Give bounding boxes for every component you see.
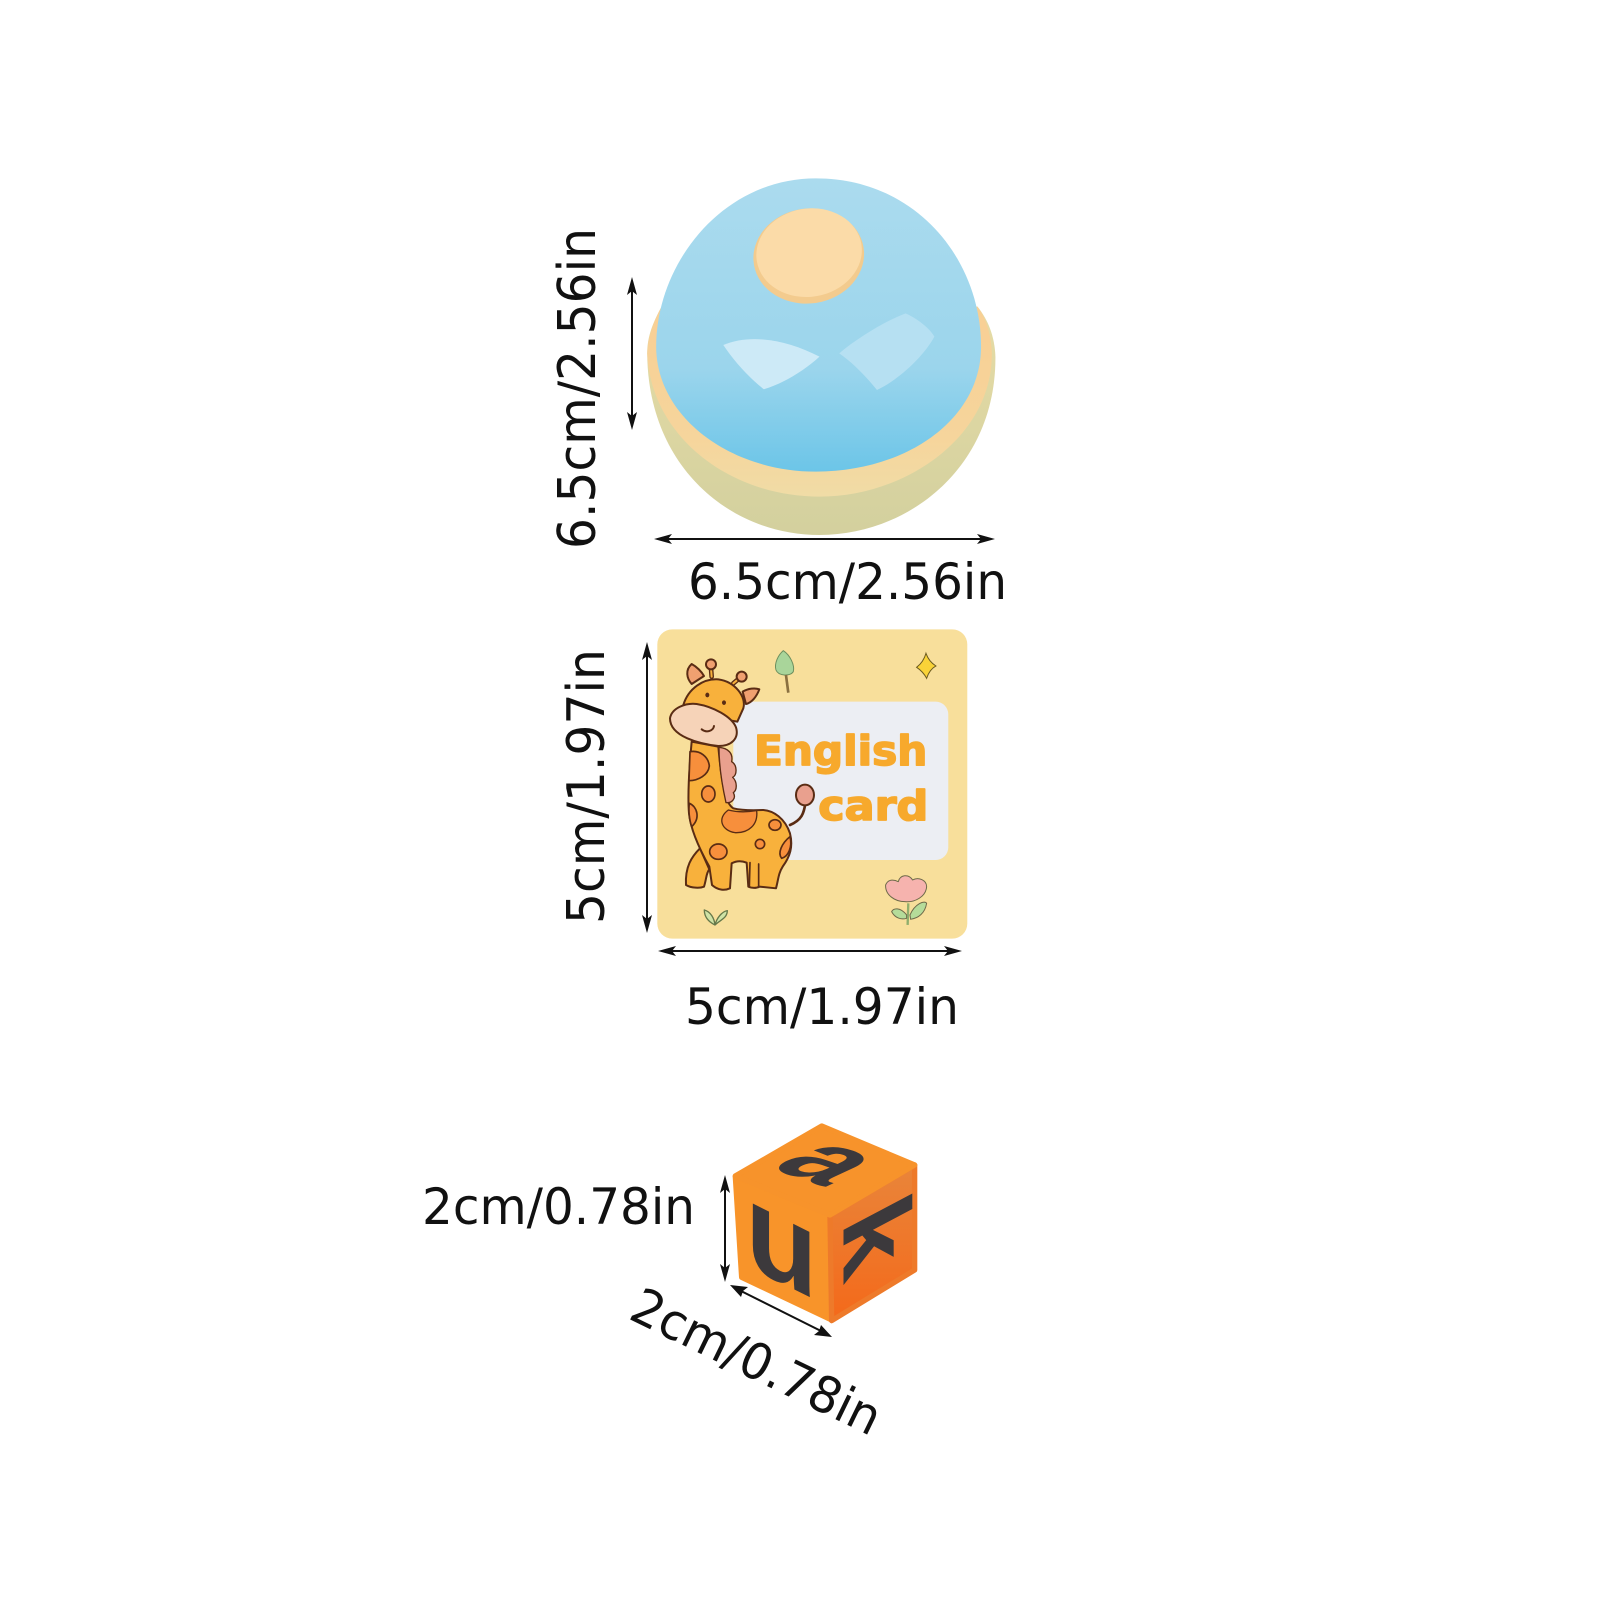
letter cube illustration xyxy=(735,1123,928,1328)
label: cube height: 2cm/0.78in xyxy=(422,1178,695,1236)
label: cube width: 2cm/0.78in xyxy=(622,1277,891,1447)
icon: star xyxy=(917,653,936,678)
label: card height: 5cm/1.97in xyxy=(557,649,617,924)
arrow: bell width xyxy=(654,534,995,544)
icon: leaf xyxy=(775,651,794,693)
label: bell height: 6.5cm/2.56in xyxy=(548,228,608,549)
cube letters: a xyxy=(746,1123,921,1198)
flash card illustration xyxy=(657,629,967,939)
icon: sprout xyxy=(704,910,727,925)
cube letters: u xyxy=(746,1154,818,1328)
card background xyxy=(657,629,967,939)
bell base top rim xyxy=(647,307,992,497)
bell base side xyxy=(647,307,995,535)
cube letters xyxy=(746,1123,928,1328)
arrow: cube height xyxy=(720,1175,730,1282)
label: card width: 5cm/1.97in xyxy=(685,978,959,1036)
card title xyxy=(754,727,928,830)
icon: giraffe xyxy=(670,659,814,890)
icon: tulip xyxy=(886,876,927,925)
arrow: bell height xyxy=(627,277,637,430)
bell illustration xyxy=(647,178,995,535)
cube letters: k xyxy=(823,1177,928,1297)
card title: card xyxy=(818,782,928,830)
cube left face xyxy=(735,1177,832,1320)
card text panel xyxy=(733,702,948,860)
arrow: cube width xyxy=(730,1285,832,1337)
dome highlights xyxy=(723,313,934,390)
cube top face xyxy=(735,1126,915,1215)
bell dome xyxy=(656,178,981,472)
bell button xyxy=(742,197,876,315)
label: bell width: 6.5cm/2.56in xyxy=(688,553,1007,611)
arrow: card height xyxy=(642,642,652,933)
card title: English xyxy=(754,727,927,775)
cube right face xyxy=(830,1165,915,1321)
arrow: card width xyxy=(658,946,962,956)
